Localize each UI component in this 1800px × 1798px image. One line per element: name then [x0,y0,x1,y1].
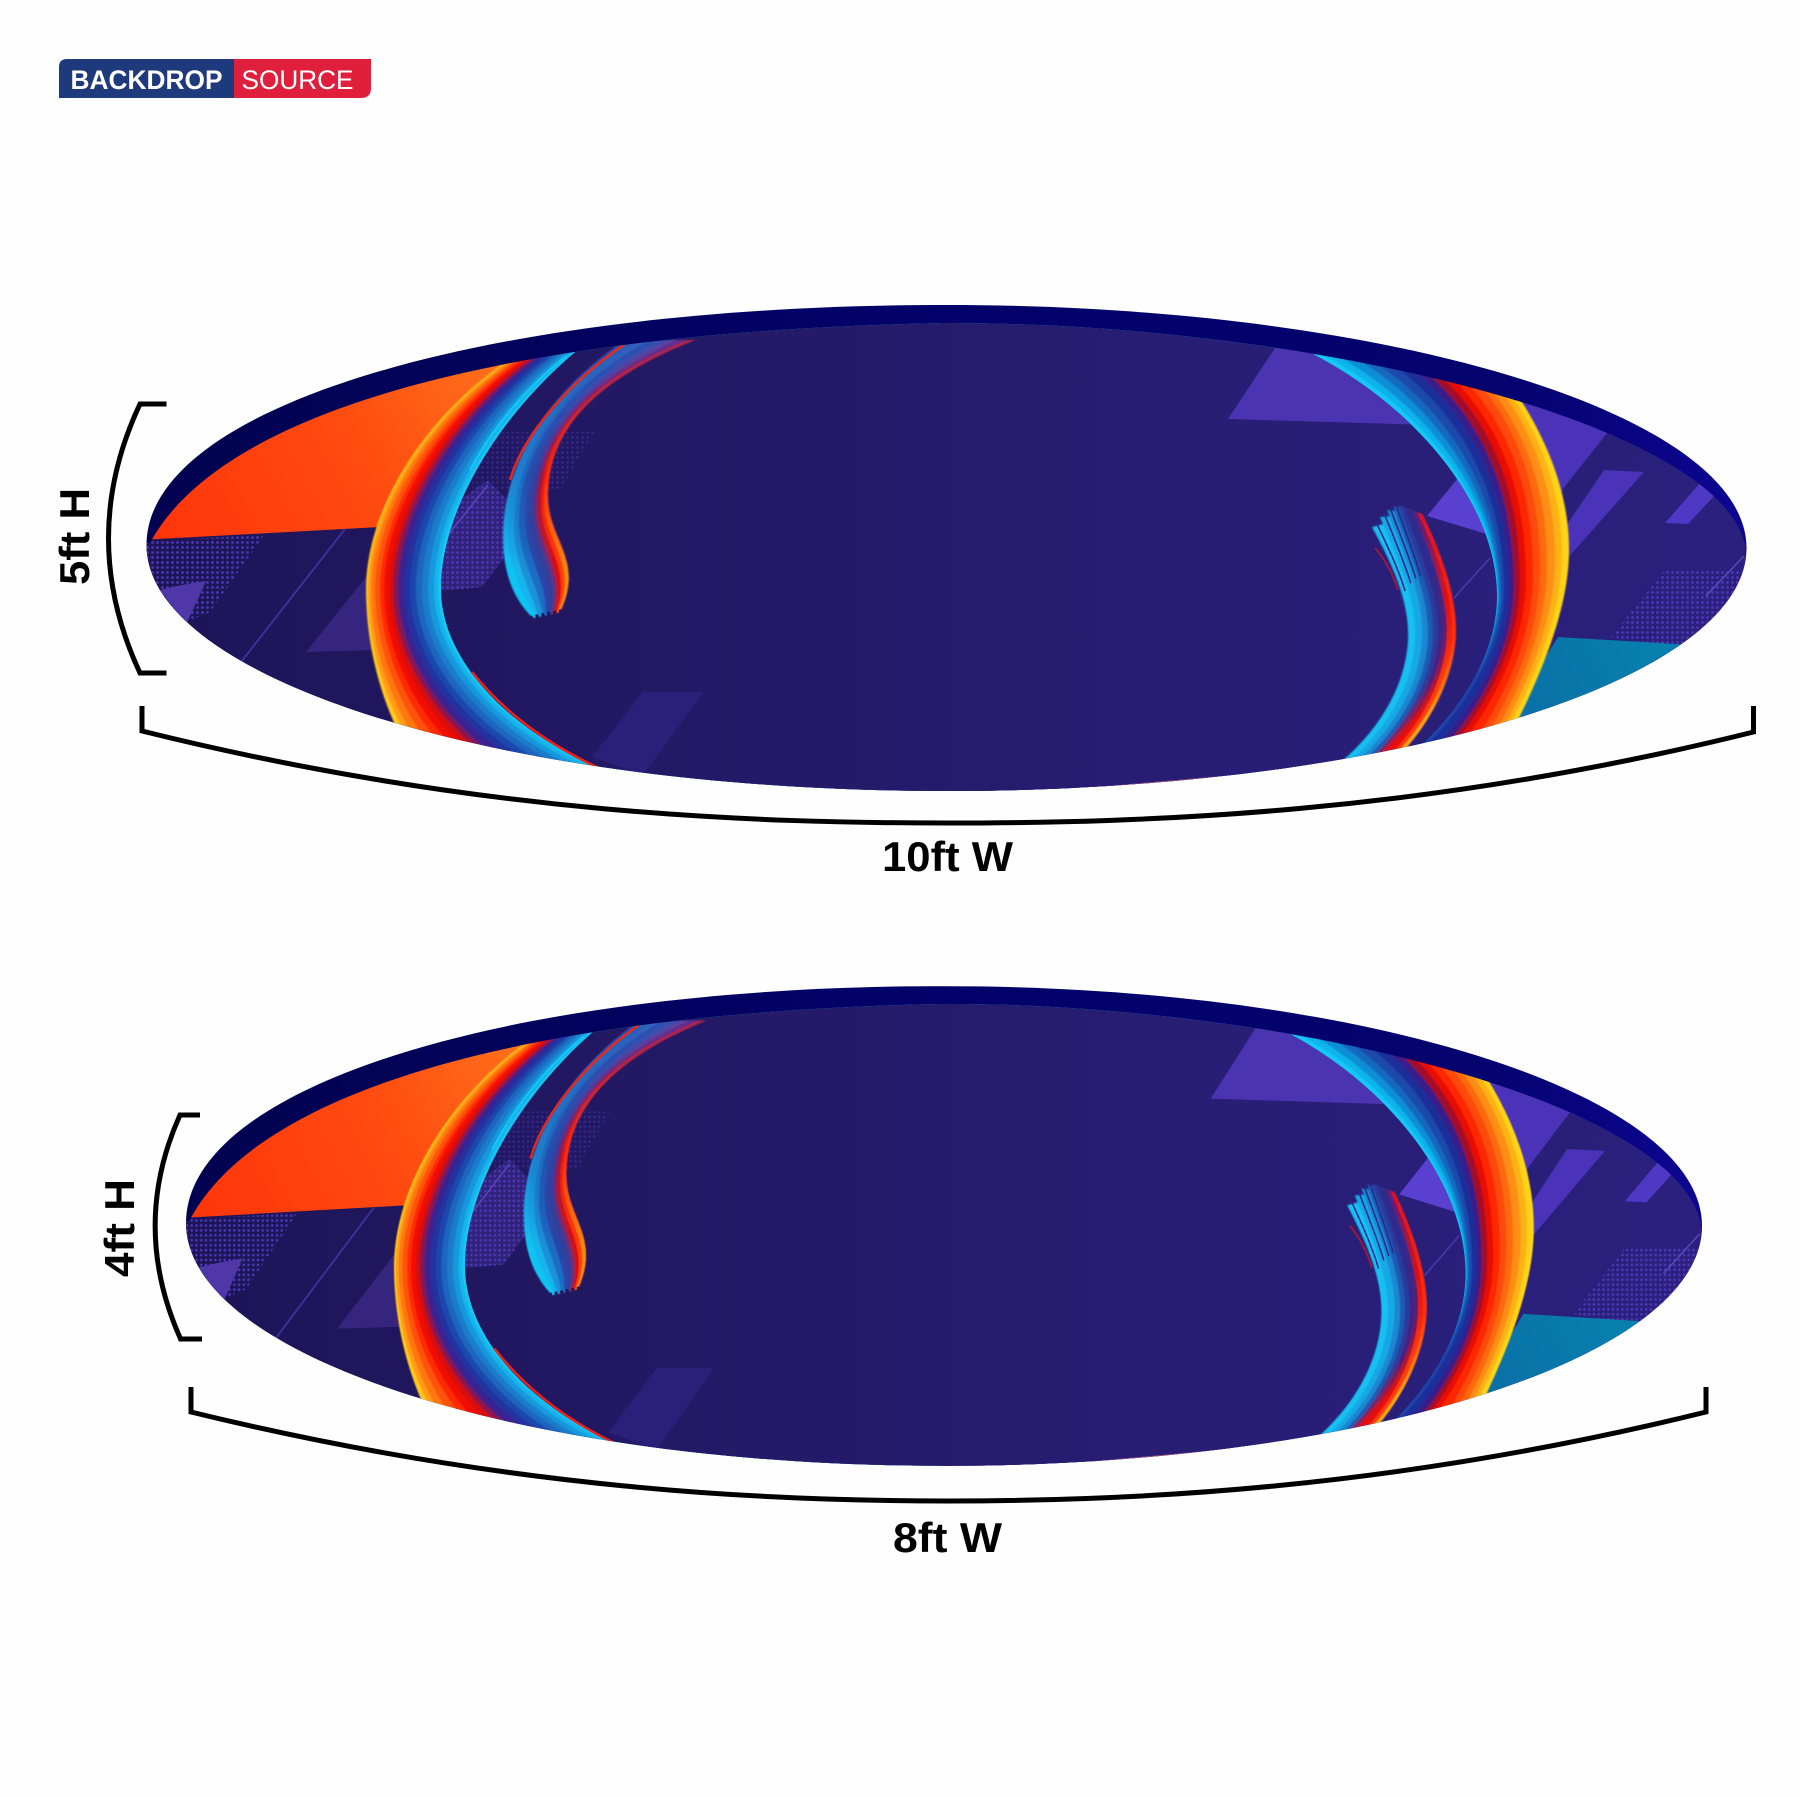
teal wedge [1490,637,1692,745]
right thin line [1706,556,1744,596]
left inner dotted patch [430,432,594,592]
red outer edge of left hook [510,344,625,480]
label: 5ft H: 5ft H [51,488,98,585]
jagged end of left hook [530,610,572,619]
thin line in right field [1454,558,1490,598]
left thin diagonal line [241,529,345,662]
red edge of left band [472,672,640,785]
lower parallelogram [592,692,704,775]
panel: 10ft by 5ft oval backdrop [130,290,1760,800]
panel: 8ft by 4ft oval backdrop [170,971,1715,1475]
left hook swirl [503,340,695,618]
width bracket: 10ft [142,706,1754,823]
left purple triangle [306,572,380,652]
small purple parallelogram [1665,482,1715,524]
upper right purple triangle [1228,330,1430,425]
width bracket: 8ft [191,1387,1706,1501]
fan strands of right hook [1376,505,1431,639]
left dotted patch [146,535,264,622]
right dotted patch [1611,570,1750,650]
logo: Backdrop Source: SOURCE [242,65,354,95]
right hook swirl [1325,505,1456,775]
logo: Backdrop Source [59,59,371,98]
left purple tile [160,581,206,625]
central oval field [441,290,1497,800]
right dark strip [1562,428,1650,524]
right rainbow band [946,290,1569,800]
cyan edge of left band [470,356,566,470]
label: 4ft H: 4ft H [96,1179,143,1277]
red fringe of right hook [1375,548,1398,590]
label: 8ft W: 8ft W [893,1514,1002,1561]
height bracket: 4ft [155,1115,202,1339]
right purple block [1500,385,1625,492]
logo: Backdrop Source: BACKDROP [70,65,222,95]
height bracket: 5ft [108,404,166,673]
orange wedge [140,300,560,540]
centre field rectangle [940,290,952,800]
right purple parallelogram [1566,470,1644,560]
left rainbow band [366,290,946,800]
label: 10ft W: 10ft W [882,833,1013,880]
middle right purple shape [1427,470,1510,538]
